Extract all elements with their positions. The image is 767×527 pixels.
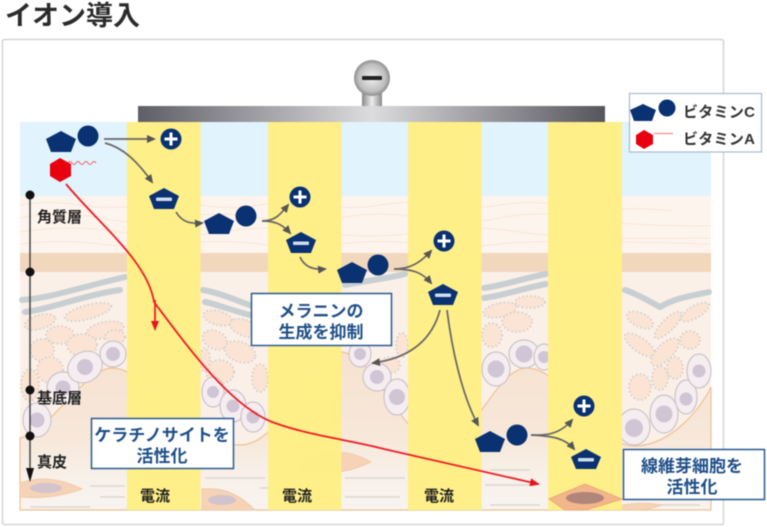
callout: melanin: メラニンの (278, 302, 364, 321)
current labels: 電流 (282, 488, 312, 505)
depth axis (26, 190, 34, 482)
vitamin C molecule 1 (46, 126, 98, 152)
minus ion 1 (149, 188, 179, 209)
layer labels: 基底層 (37, 389, 82, 407)
title: イオン導入 (5, 1, 140, 31)
legend: ビタミンA (683, 130, 755, 148)
plus ion 4 (574, 396, 594, 416)
callout: fibroblast: 活性化 (666, 478, 718, 497)
dermis (20, 352, 711, 510)
dermis fibres (30, 470, 710, 507)
legend: ビタミンC (683, 103, 755, 121)
minus ion 4 (571, 449, 601, 469)
legend (630, 94, 762, 152)
layer labels (37, 208, 82, 471)
vitamin C molecule 3 (337, 254, 388, 283)
callout: fibroblast (624, 450, 764, 500)
minus ion 2 (286, 232, 316, 253)
vitamin C molecule 4 (475, 424, 528, 452)
layer labels: 角質層 (37, 208, 82, 226)
vitamin C molecule 2 (204, 206, 256, 234)
minus ion 3 (428, 284, 458, 305)
vitamin A molecule (50, 158, 71, 182)
electrode (138, 60, 605, 122)
plus ion 1 (160, 128, 182, 150)
callout: melanin (252, 294, 392, 346)
plus ion 3 (434, 230, 454, 252)
current labels: 電流 (140, 488, 170, 505)
layer labels: 真皮 (37, 453, 67, 471)
skin cross-section (20, 122, 712, 510)
callout: keratinocyte: 活性化 (136, 447, 188, 466)
fibroblast target (549, 484, 622, 510)
red pathway of vitamin A (66, 162, 538, 484)
horny flat cells (22, 274, 709, 318)
fibroblasts (20, 452, 662, 510)
callout: keratinocyte: ケラチノサイトを (94, 426, 230, 445)
callout: fibroblast: 線維芽細胞を (641, 457, 743, 476)
basal cells with nuclei (23, 340, 711, 445)
current bands (127, 122, 622, 510)
plus ion 2 (290, 186, 310, 208)
spinous cells (21, 296, 712, 401)
current labels (140, 488, 454, 505)
callout: keratinocyte (92, 418, 234, 468)
callout: melanin: 生成を抑制 (278, 322, 364, 342)
grey arrows (104, 139, 574, 449)
current labels: 電流 (424, 488, 454, 505)
